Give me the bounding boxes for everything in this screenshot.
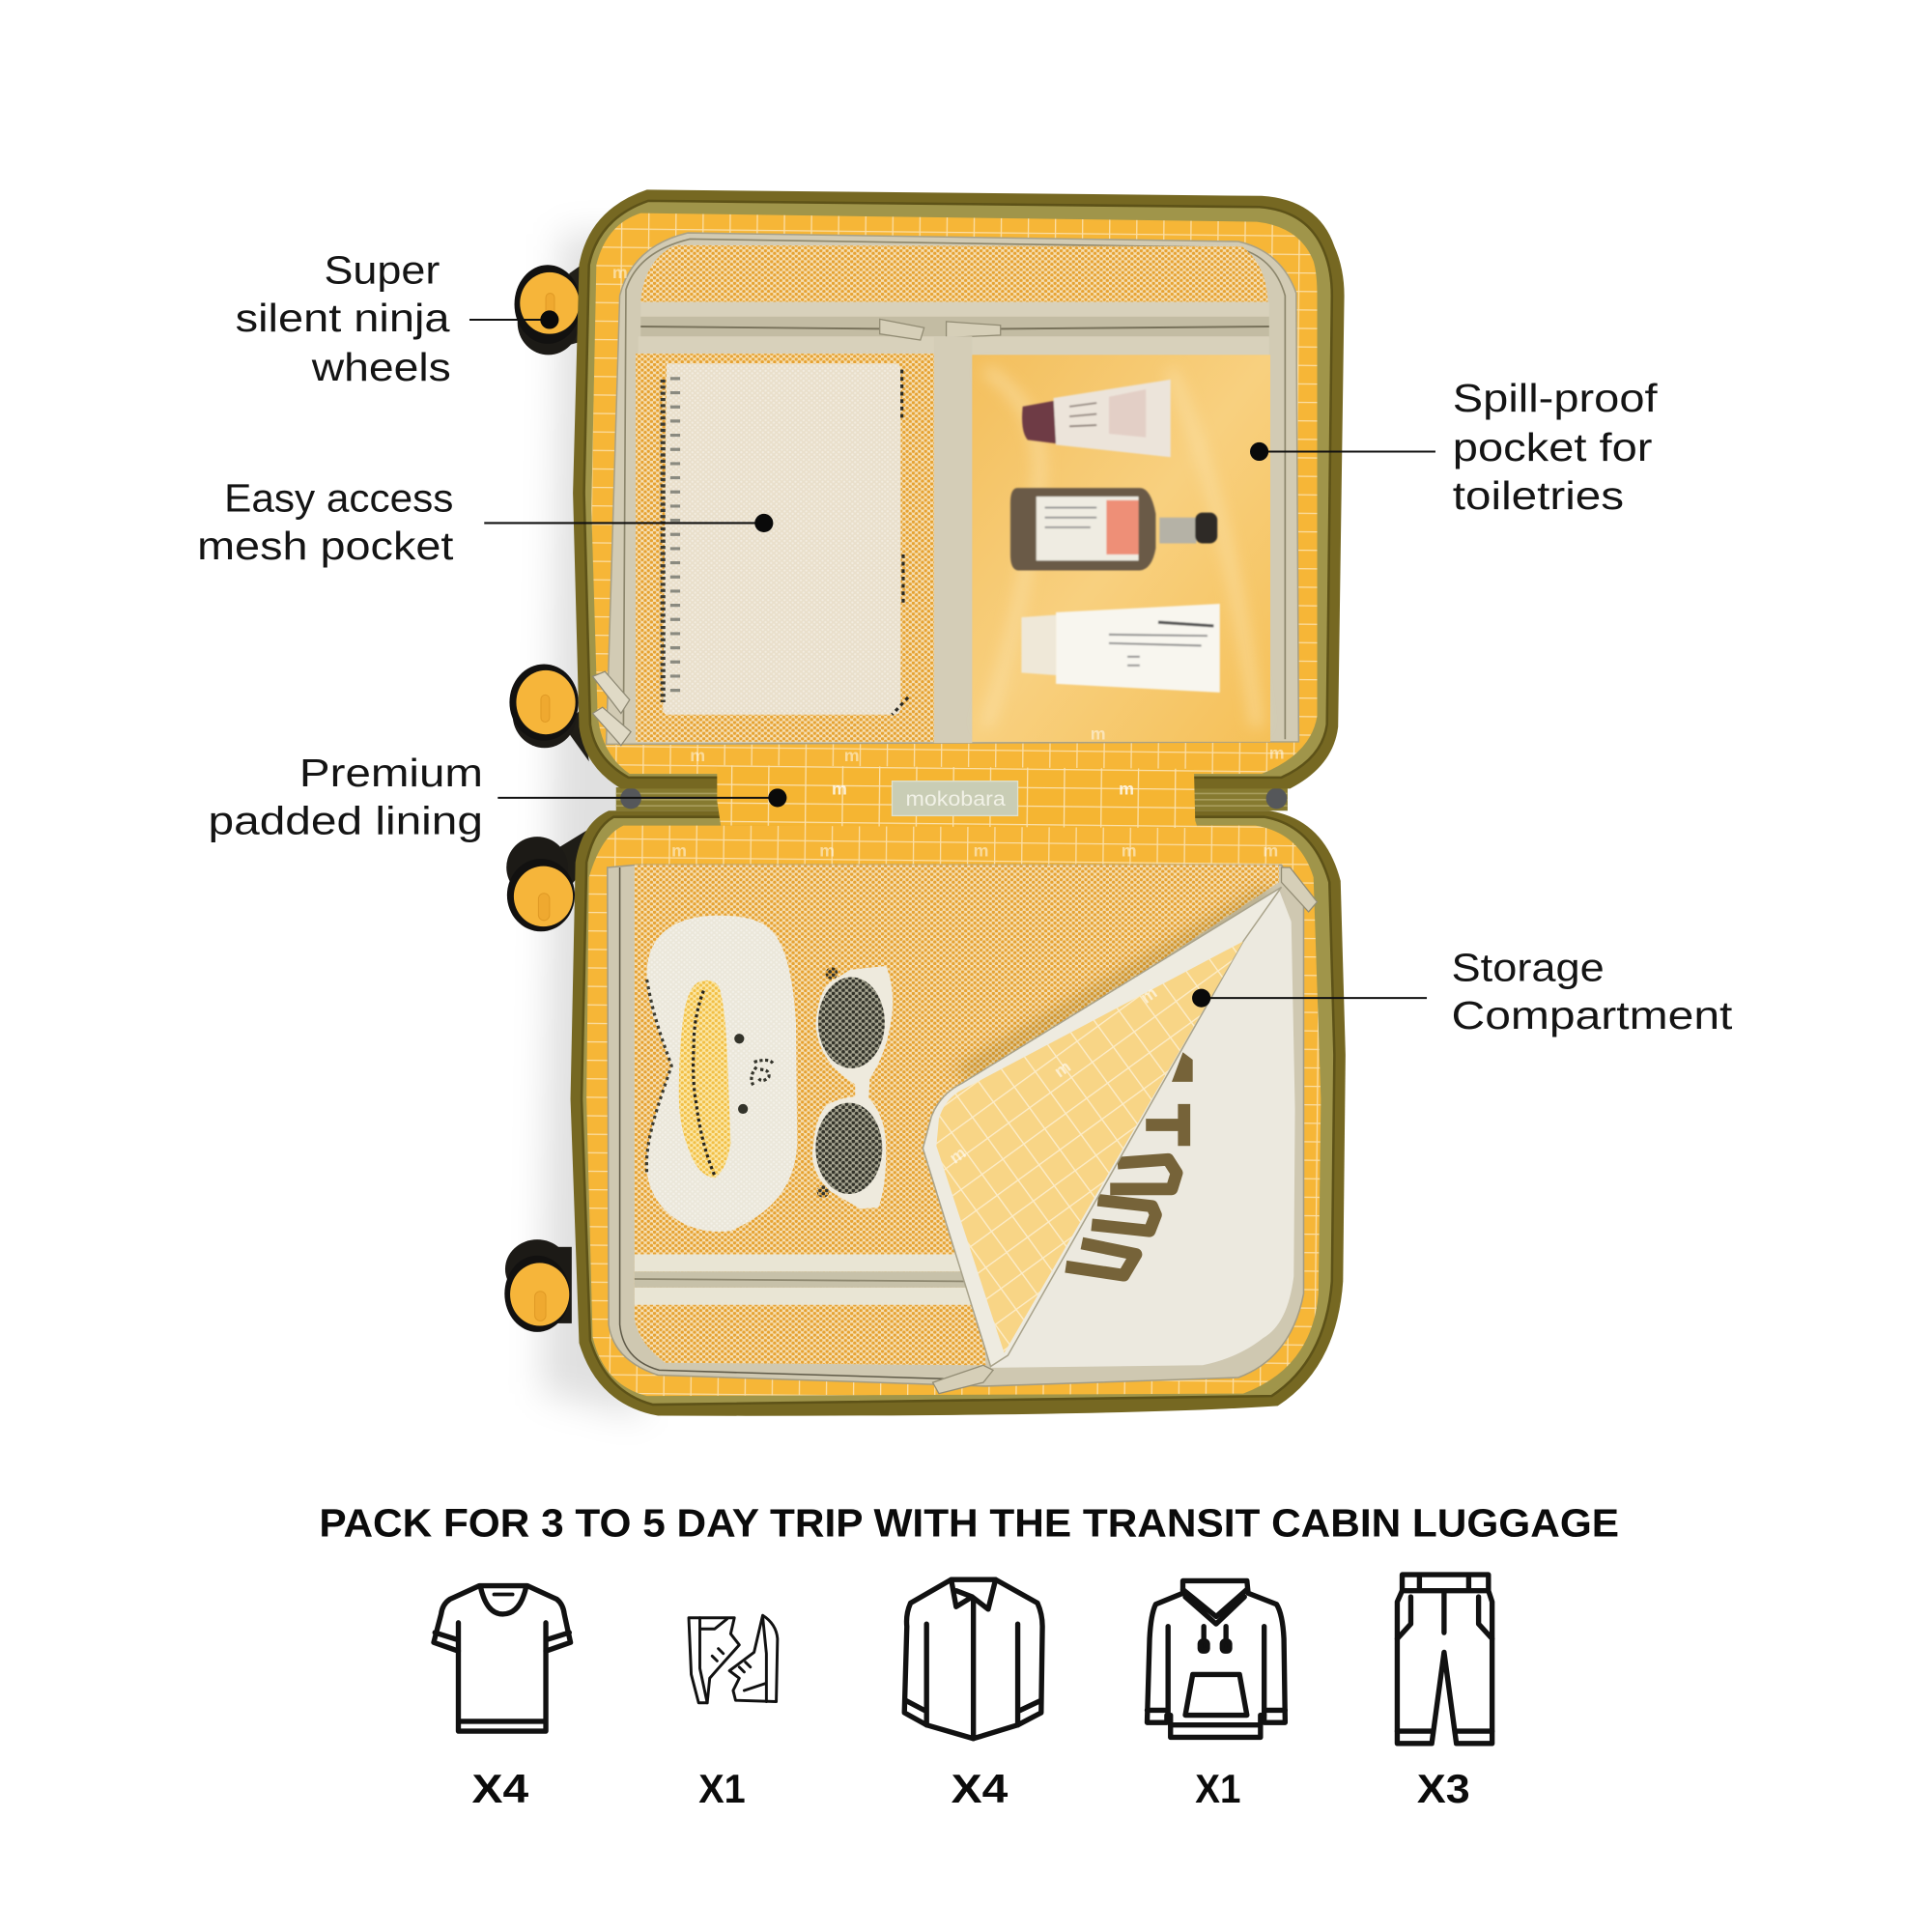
top strips and zipper [639,301,1269,355]
folded flap [923,887,1282,1367]
lower shell rim [582,817,1334,1405]
lower lining marks: m [974,840,989,860]
callout: padded lining [497,788,786,807]
upper lining [591,213,1318,774]
count: t-shirt: X4 [472,1766,529,1811]
hinge strip [616,787,1288,810]
flap marks: m [1137,982,1160,1008]
suitcase lower shell [571,810,1346,1416]
icon: hoodie [1148,1580,1285,1737]
count: sneakers: X1 [698,1766,746,1811]
sunglasses [812,966,893,1208]
shirt lettering [1065,1104,1184,1275]
lining marks: m [1091,724,1106,743]
padded handle strip [717,765,1198,828]
heading: PACK FOR 3 TO 5 DAY TRIP WITH THE TRANSIT CABIN LUGGAGE [319,1501,1619,1546]
brand tag [892,781,1018,815]
lower lining marks: m [1122,840,1137,860]
wheel: upper top [515,261,586,355]
lower mesh compartment [635,865,1279,1365]
label: mesh pocket: Easy access [224,475,453,520]
suitcase upper shell [573,189,1345,788]
label: storage compartment: Storage [1452,945,1605,989]
upper zip pulls [593,671,631,746]
label: spill-proof pocket: toiletries [1453,473,1624,518]
t-shirt inside compartment [991,890,1295,1368]
wheel: lower top [506,831,586,931]
hinge clip right [1266,788,1287,809]
label: mesh pocket: mesh pocket [197,524,454,568]
suitcase wheels [504,261,589,1332]
icon: sneakers [689,1615,778,1703]
label: spill-proof pocket: pocket for [1453,425,1652,469]
padded handle strip: m [832,780,847,799]
eye mask [646,916,797,1232]
padded handle strip: m [1119,780,1134,799]
flap marks [946,982,1160,1168]
label: spill-proof pocket [1453,376,1658,518]
callout: storage compartment [1192,989,1427,1008]
lower lining marks: m [671,840,687,860]
upper organiser border [607,233,1298,744]
lower lining marks: m [819,840,835,860]
upper shell outer [573,189,1345,788]
label: padded lining: Premium [299,751,483,795]
lining marks [612,263,1285,765]
lower zip pull [933,1365,993,1394]
lower lining marks [671,840,1278,860]
lining marks: m [690,746,705,765]
mesh pocket [636,354,935,742]
icon: t-shirt [434,1586,571,1731]
flap marks: m [1051,1057,1074,1081]
count: hoodie: X1 [1195,1766,1240,1811]
lower lining [586,826,1321,1396]
lower strips [635,1254,980,1305]
brand tag: mokobara [906,786,1007,810]
lower shell outer [571,810,1346,1416]
flap marks: m [946,1143,970,1168]
lower organiser zipper [608,865,1303,1386]
callout: wheels [469,310,558,329]
callout: spill-proof pocket [1250,442,1435,461]
label: padded lining: padded lining [209,799,483,843]
label: storage compartment: Compartment [1452,993,1733,1037]
icon: shirt [904,1579,1042,1739]
lining marks: m [844,746,860,765]
count: shirt: X4 [952,1766,1009,1811]
label: wheels: silent ninja [236,296,450,340]
clear toiletries pocket [972,355,1270,742]
wheel: upper bottom [509,665,589,761]
lining marks: m [1269,744,1285,763]
count: pants: X3 [1417,1766,1470,1811]
lower zipper line [620,867,985,1380]
tube 2 [1021,604,1220,693]
label: wheels: wheels [311,345,451,389]
top mesh pocket [640,245,1267,303]
lining marks: m [612,263,628,282]
label: padded lining [209,751,483,843]
label: wheels [236,247,451,389]
tube 1 [1022,380,1171,457]
label: mesh pocket [197,475,454,568]
hinge clip left [620,788,641,809]
upper shell rim [584,201,1332,778]
icon: pants [1397,1575,1492,1744]
label: wheels: Super [324,247,440,292]
vertical divider [934,336,972,743]
suitcase shadow [542,234,666,1417]
upper zipper lines [623,239,1285,739]
lower lining marks: m [1263,840,1278,860]
label: spill-proof pocket: Spill-proof [1453,376,1658,420]
bottle [1010,488,1217,571]
zip pulls [880,319,1001,340]
upper-right zip pull [1282,867,1318,912]
notebook [663,363,908,715]
callout: mesh pocket [484,514,773,532]
wheel: lower bottom [504,1239,572,1332]
label: storage compartment [1452,945,1733,1037]
